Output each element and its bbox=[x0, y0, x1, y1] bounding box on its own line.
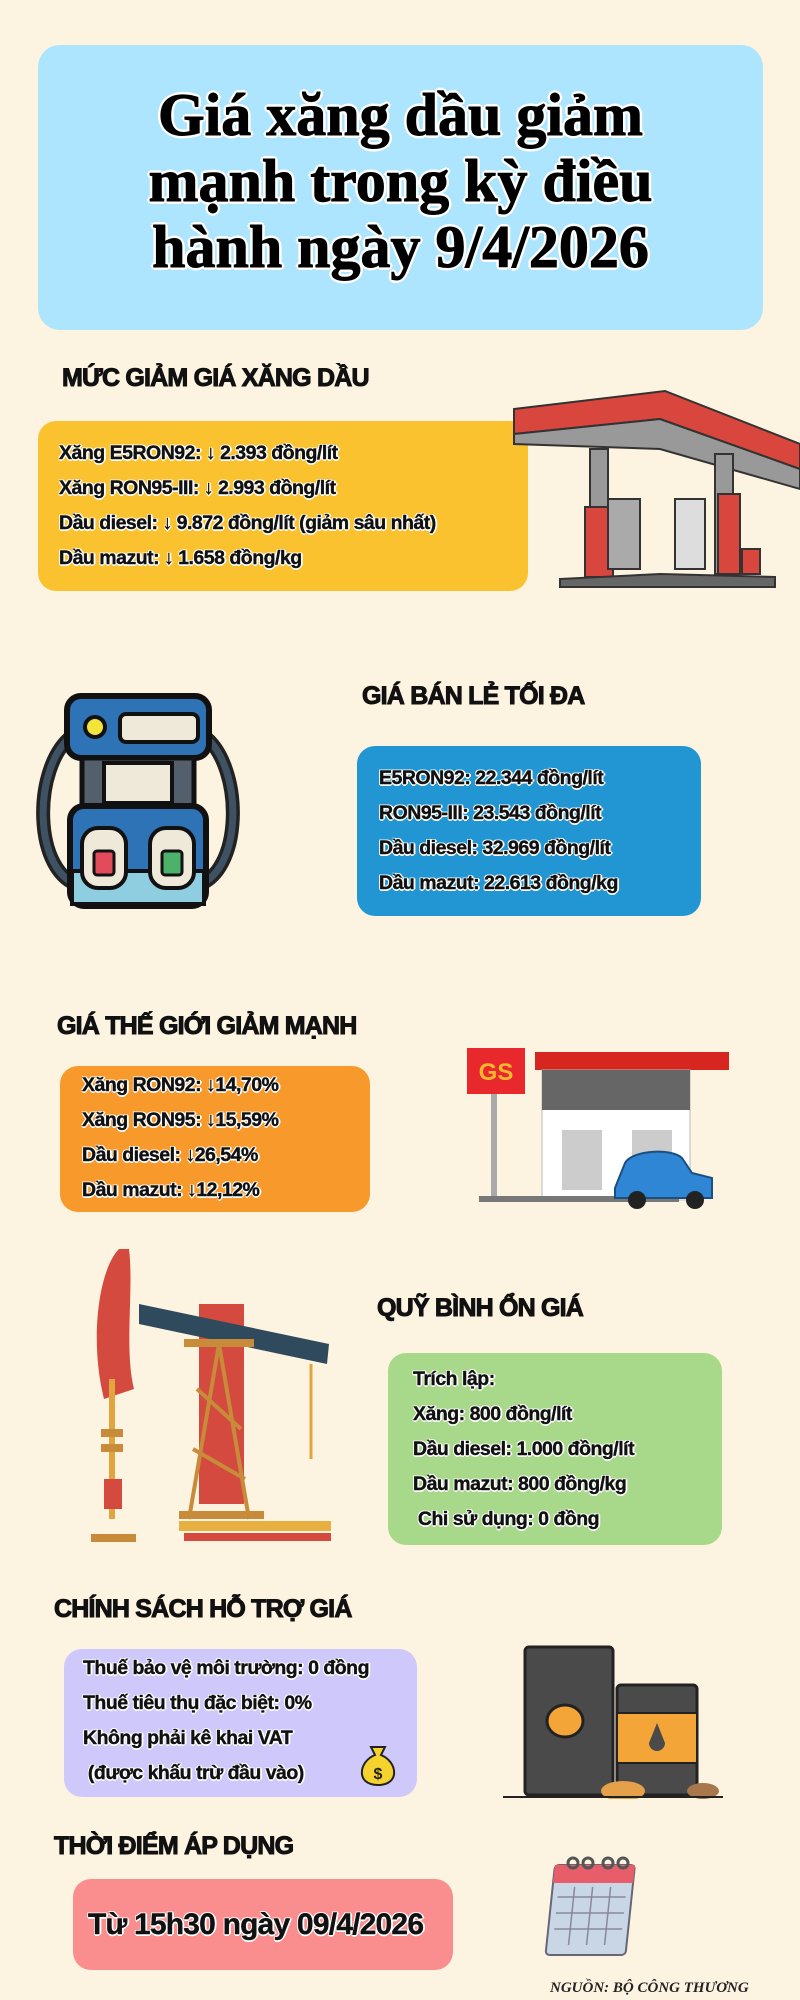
icon: oil barrels bbox=[503, 1646, 723, 1799]
panel: quỹ bình ổn giá: Xăng: 800 đồng/lít bbox=[413, 1403, 572, 1425]
panel: giá bán lẻ: E5RON92: 22.344 đồng/lít bbox=[379, 767, 603, 789]
title panel bbox=[38, 45, 763, 330]
icon: money bag: $ bbox=[374, 1766, 383, 1783]
heading: quỹ bình ổn: QUỸ BÌNH ỔN GIÁ bbox=[377, 1294, 583, 1322]
icon: gas station bbox=[513, 390, 800, 588]
panel: chính sách hỗ trợ: Thuế bảo vệ môi trường: 0 đồng bbox=[83, 1657, 369, 1679]
panel: giá thế giới: Xăng RON92: ↓14,70% bbox=[82, 1074, 278, 1096]
panel: giá bán lẻ bbox=[357, 746, 701, 916]
panel: giá thế giới: Dầu diesel: ↓26,54% bbox=[82, 1144, 258, 1166]
panel: quỹ bình ổn giá bbox=[388, 1353, 722, 1545]
panel: quỹ bình ổn giá: Trích lập: bbox=[413, 1368, 495, 1390]
panel: giá thế giới: Dầu mazut: ↓12,12% bbox=[82, 1179, 259, 1201]
panel: mức giảm giá bbox=[38, 421, 528, 591]
panel: mức giảm giá: Dầu diesel: ↓ 9.872 đồng/lít (giảm sâu nhất) bbox=[59, 512, 436, 534]
panel: thời điểm áp dụng bbox=[73, 1879, 453, 1970]
panel: mức giảm giá: Xăng E5RON92: ↓ 2.393 đồng/lít bbox=[59, 442, 338, 464]
title panel: mạnh trong kỳ điều bbox=[148, 148, 653, 214]
icon: gs station with car: GS bbox=[479, 1059, 513, 1086]
icon: oil pumpjack bbox=[91, 1249, 331, 1542]
source text: NGUỒN: BỘ CÔNG THƯƠNG bbox=[550, 1980, 749, 1996]
panel: quỹ bình ổn giá: Dầu mazut: 800 đồng/kg bbox=[413, 1473, 626, 1495]
panel: giá thế giới bbox=[60, 1066, 370, 1212]
heading: mức giảm: MỨC GIẢM GIÁ XĂNG DẦU bbox=[62, 364, 369, 392]
icon: money bag bbox=[360, 1746, 396, 1786]
title panel: hành ngày 9/4/2026 bbox=[152, 214, 649, 280]
icon: calendar bbox=[544, 1856, 636, 1956]
panel: mức giảm giá: Dầu mazut: ↓ 1.658 đồng/kg bbox=[59, 547, 302, 569]
heading: chính sách: CHÍNH SÁCH HỖ TRỢ GIÁ bbox=[54, 1595, 352, 1623]
panel: giá bán lẻ: RON95-III: 23.543 đồng/lít bbox=[379, 802, 601, 824]
heading: thời điểm: THỜI ĐIỂM ÁP DỤNG bbox=[54, 1832, 293, 1860]
panel: chính sách hỗ trợ: Thuế tiêu thụ đặc biệt: 0% bbox=[83, 1692, 312, 1714]
heading: giá bán lẻ: GIÁ BÁN LẺ TỐI ĐA bbox=[362, 682, 585, 710]
icon: gs station with car bbox=[467, 1048, 729, 1209]
panel: giá bán lẻ: Dầu mazut: 22.613 đồng/kg bbox=[379, 872, 618, 894]
title panel: Giá xăng dầu giảm bbox=[158, 82, 643, 148]
panel: giá thế giới: Xăng RON95: ↓15,59% bbox=[82, 1109, 278, 1131]
panel: quỹ bình ổn giá: Dầu diesel: 1.000 đồng/lít bbox=[413, 1438, 634, 1460]
panel: mức giảm giá: Xăng RON95-III: ↓ 2.993 đồng/lít bbox=[59, 477, 336, 499]
panel: thời điểm áp dụng: Từ 15h30 ngày 09/4/2026 bbox=[88, 1908, 423, 1941]
panel: chính sách hỗ trợ: (được khấu trừ đầu vào) bbox=[88, 1762, 304, 1784]
panel: chính sách hỗ trợ bbox=[64, 1649, 417, 1797]
panel: giá bán lẻ: Dầu diesel: 32.969 đồng/lít bbox=[379, 837, 610, 859]
heading: giá thế giới: GIÁ THẾ GIỚI GIẢM MẠNH bbox=[57, 1012, 357, 1040]
panel: quỹ bình ổn giá: Chi sử dụng: 0 đồng bbox=[418, 1508, 599, 1530]
icon: fuel pump bbox=[36, 693, 240, 909]
panel: chính sách hỗ trợ: Không phải kê khai VAT bbox=[83, 1727, 292, 1749]
